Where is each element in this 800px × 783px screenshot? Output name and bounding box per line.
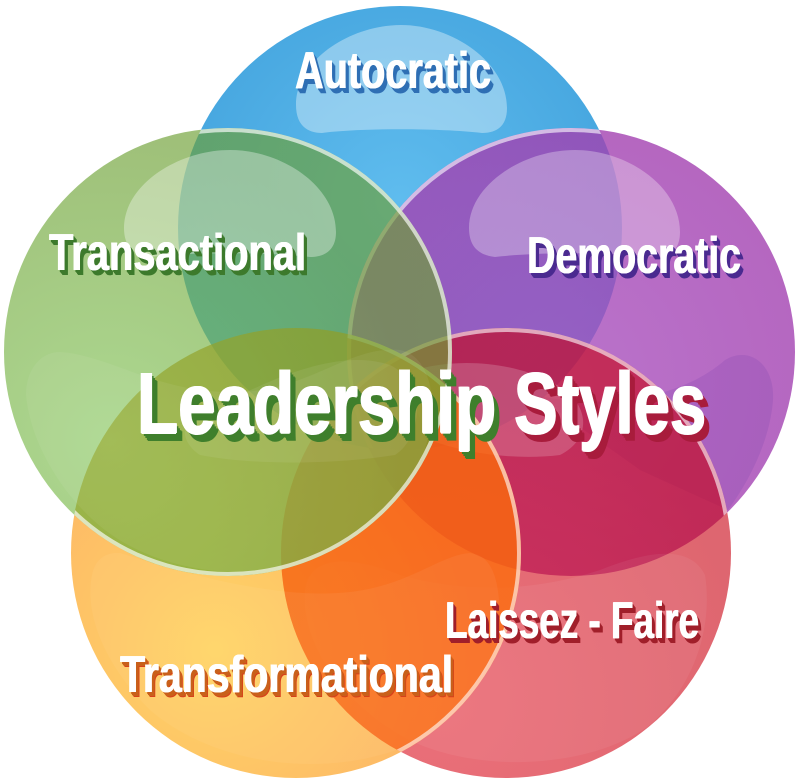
label: Laissez - Faire: Laissez - Faire: [445, 592, 699, 650]
label: Autocratic: Autocratic: [295, 42, 491, 100]
circle: transformational: [71, 328, 521, 778]
title: Leadership Styles: Leadership: [137, 355, 496, 452]
circle: laissez-faire: [281, 328, 731, 778]
circle: transactional: [4, 128, 452, 576]
circle: autocratic: [178, 6, 622, 450]
title: Leadership Styles: Styles: [514, 355, 706, 452]
label: Transactional: Transactional: [49, 224, 306, 282]
circle: democratic: [347, 128, 795, 576]
label: Transformational: Transformational: [120, 646, 453, 704]
